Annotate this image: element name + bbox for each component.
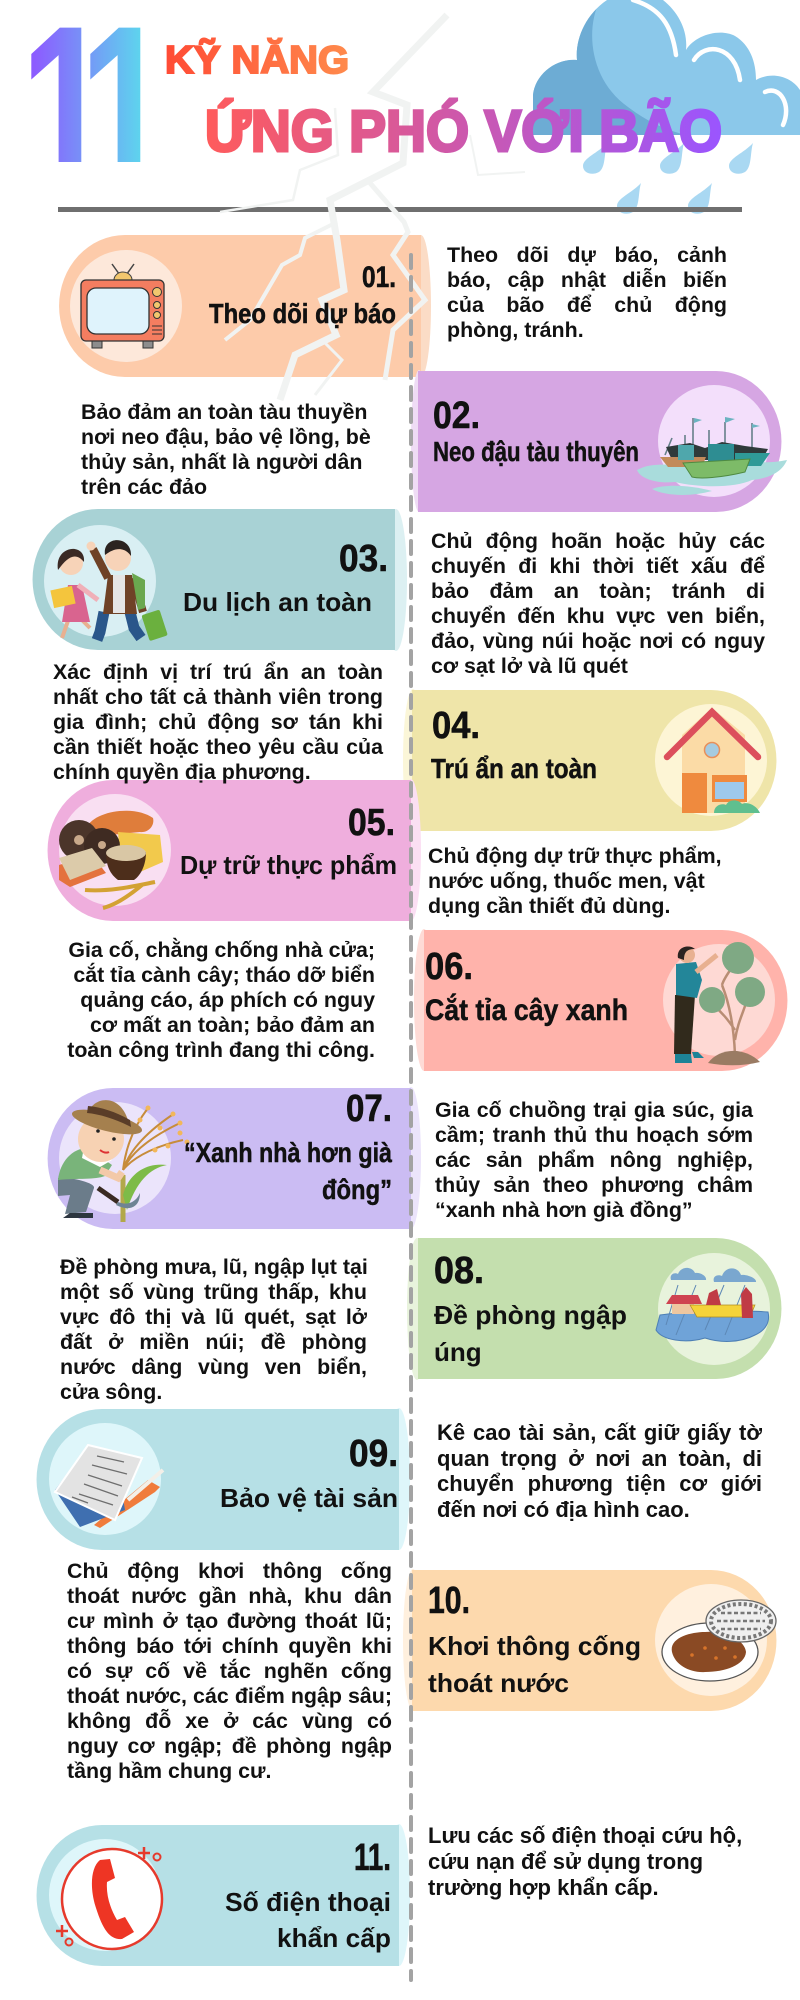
number 01: 01.	[362, 261, 396, 294]
panel: 11 số điện thoại khẩn cấp	[37, 1824, 410, 1966]
text: 03 description: đảo, vùng núi hoặc nơi có nguy	[431, 629, 765, 653]
text: 05 description: nước uống, thuốc men, vật	[428, 869, 705, 893]
panel: 08 đề phòng ngập úng	[407, 1238, 781, 1380]
icon: travellers	[50, 540, 168, 641]
text: 04 description	[53, 660, 384, 784]
heading 05: Dự trữ thực phẩm	[180, 850, 397, 880]
icon: television	[81, 264, 164, 348]
divider	[58, 207, 742, 212]
text: 03 description: bảo đảm an toàn; tránh di	[431, 579, 765, 603]
text: 09 description: chuyển phương tiện cơ giới	[437, 1471, 762, 1496]
text: 10 description: có sự cố về tắc nghẽn cống	[67, 1659, 392, 1683]
heading 07: đông”	[322, 1174, 392, 1205]
text: 06 description: Gia cố, chằng chống nhà cửa;	[68, 938, 375, 962]
text: 11 description: cứu nạn để sử dụng trong	[428, 1849, 703, 1874]
text: 04 description: Xác định vị trí trú ẩn an toàn	[53, 660, 383, 684]
panel: 04 trú ẩn an toàn	[403, 689, 776, 831]
panel: 01 theo dõi dự báo	[70, 250, 396, 362]
text: 04 description: nhất cho tất cả thành viên trong	[53, 685, 383, 709]
icon: man pruning tree	[674, 942, 765, 1065]
icon: fishing boats	[637, 417, 787, 495]
number 03: 03.	[339, 538, 388, 580]
text: 02 description: nơi neo đậu, bảo vệ lồng, bè	[81, 425, 371, 449]
text: 08 description: cửa sông.	[60, 1380, 162, 1404]
text: 01 description	[447, 243, 727, 342]
heading 11: Số điện thoại	[225, 1887, 391, 1917]
text: 06 description	[67, 938, 375, 1062]
icon: storm cloud	[533, 0, 800, 135]
number 10: 10.	[428, 1580, 470, 1622]
title: KỸ NĂNG: KỸ NĂNG	[165, 38, 349, 82]
panel: 10 khơi thông cống thoát nước	[403, 1569, 776, 1711]
panel: 09 bảo vệ tài sản	[37, 1408, 410, 1550]
icon: emergency phone	[56, 1847, 162, 1949]
icon: food	[59, 811, 163, 908]
text: 09 description: đến nơi có địa hình cao.	[437, 1497, 690, 1522]
icon: open drain cover	[662, 1600, 776, 1681]
number 06: 06.	[425, 946, 473, 988]
text: 02 description: trên các đảo	[81, 475, 207, 499]
icon: rain drops	[583, 143, 753, 214]
text: 03 description: chuyển đến khu vực ven biển,	[431, 604, 765, 628]
text: 10 description: tầng hầm chung cư.	[67, 1759, 271, 1783]
heading 06: Cắt tỉa cây xanh	[425, 993, 628, 1027]
text: 05 description	[428, 844, 722, 918]
text: 04 description: gia đình; chủ động sơ tán khi	[53, 710, 383, 734]
text: 01 description: của bão để chủ động	[447, 293, 727, 317]
panel: 01 background	[59, 235, 431, 377]
heading 10: Khơi thông cống	[428, 1631, 641, 1661]
heading 10	[428, 1631, 641, 1698]
heading 08: Đề phòng ngập	[434, 1300, 627, 1330]
text: 11 description: Lưu các số điện thoại cứu hộ,	[428, 1823, 742, 1848]
text: 07 description: “xanh nhà hơn già đồng”	[435, 1198, 693, 1222]
text: 06 description: toàn công trình đang thi công.	[67, 1038, 375, 1062]
text: 05 description: Chủ động dự trữ thực phẩm,	[428, 844, 722, 868]
text: 10 description: Chủ động khơi thông cống	[67, 1559, 392, 1583]
text: 02 description: thủy sản, nhất là người dân	[81, 450, 362, 474]
text: 10 description: thông báo tới chính quyền khi	[67, 1634, 392, 1658]
text: 06 description: quảng cáo, áp phích có nguy	[80, 988, 375, 1012]
text: 03 description: chuyến đi khi thời tiết xấu để	[431, 554, 765, 578]
text: 08 description: đất ở miền núi; đề phòng	[60, 1330, 367, 1354]
heading 08: úng	[434, 1337, 482, 1367]
text: 09 description: Kê cao tài sản, cất giữ giấy tờ	[437, 1420, 762, 1445]
text: 04 description: cần thiết hoặc theo yêu cầu của	[53, 735, 383, 759]
text: 07 description: các sản phẩm nông nghiệp,	[435, 1148, 753, 1172]
heading 09: Bảo vệ tài sản	[220, 1483, 398, 1513]
heading 10: thoát nước	[428, 1668, 569, 1698]
text: 03 description: Chủ động hoãn hoặc hủy các	[431, 529, 765, 553]
text: 10 description: thoát nước, các điểm ngập sâu;	[67, 1684, 392, 1708]
text: 04 description: chính quyền địa phương.	[53, 760, 311, 784]
number 05: 05.	[348, 802, 395, 844]
text: 08 description: một số vùng trũng thấp, khu	[60, 1280, 367, 1304]
text: 02 description: Bảo đảm an toàn tàu thuyền	[81, 400, 367, 424]
dashed timeline	[409, 255, 413, 1980]
text: 09 description	[437, 1420, 762, 1522]
panel: 03 du lịch an toàn	[33, 509, 407, 651]
text: 07 description: thủy sản theo phương châm	[435, 1173, 753, 1197]
heading 11: khẩn cấp	[277, 1923, 391, 1953]
panel: 06 cắt tỉa cây xanh	[414, 929, 787, 1071]
text: 10 description: không đỗ xe ở các vùng có	[67, 1709, 392, 1733]
heading 02: Neo đậu tàu thuyên	[433, 436, 639, 467]
text: 10 description: nguy cơ ngập; đề phòng ngập	[67, 1734, 392, 1758]
heading 07: “Xanh nhà hơn già	[184, 1137, 392, 1168]
text: 01 description: báo, cập nhật diễn biến	[447, 268, 727, 292]
text: 05 description: dụng cần thiết đủ dùng.	[428, 894, 670, 918]
title: ỨNG PHÓ VỚI BÃO: ỨNG PHÓ VỚI BÃO	[205, 99, 722, 164]
text: 10 description	[67, 1559, 392, 1783]
text: 10 description: thoát nước gần nhà, khu dân	[67, 1584, 392, 1608]
panel: 02 neo đậu tàu thuyền	[411, 370, 787, 512]
heading 04: Trú ẩn an toàn	[431, 753, 597, 784]
number 07: 07.	[346, 1088, 392, 1130]
text: 11 description: trường hợp khẩn cấp.	[428, 1875, 659, 1900]
text: 08 description: vực đô thị và lũ quét, sạt lở	[60, 1305, 367, 1329]
heading 01: Theo dõi dự báo	[209, 298, 396, 329]
text: 08 description: nước dâng vùng ven biển,	[60, 1355, 367, 1379]
text: 10 description: cư mình ở tạo đường thoát lũ;	[67, 1609, 392, 1633]
icon: farmer with rice	[58, 1100, 190, 1222]
text: 06 description: cơ mất an toàn; bảo đảm an	[90, 1013, 375, 1037]
text: 11 description	[428, 1823, 742, 1900]
heading 08	[434, 1300, 627, 1367]
icon: flood rescue	[656, 1268, 769, 1341]
number 02: 02.	[433, 395, 480, 437]
text: 07 description: cầm; tranh thủ thu hoạch sớm	[435, 1123, 753, 1147]
panel: 07 xanh nhà hơn già đồng	[48, 1087, 421, 1229]
text: 07 description: Gia cố chuồng trại gia súc, gia	[435, 1098, 753, 1122]
text: 07 description	[435, 1098, 754, 1222]
number 11: 11.	[354, 1837, 391, 1879]
text: 02 description	[81, 400, 371, 499]
heading 03: Du lịch an toàn	[183, 587, 372, 617]
text: 06 description: cắt tỉa cành cây; tháo dỡ biển	[73, 963, 375, 987]
number 08: 08.	[434, 1250, 484, 1292]
icon: house	[667, 708, 760, 813]
number 04: 04.	[432, 705, 480, 747]
number 09: 09.	[349, 1433, 398, 1475]
panel: 05 dự trữ thực phẩm	[48, 779, 421, 921]
text: 08 description: Đề phòng mưa, lũ, ngập lụt tại	[60, 1255, 368, 1279]
text: 01 description: Theo dõi dự báo, cảnh	[447, 243, 727, 267]
lightning bolt	[220, 15, 525, 400]
text: 03 description	[431, 529, 765, 678]
text: 09 description: quan trọng ở nơi an toàn, di	[437, 1446, 762, 1471]
heading 07	[184, 1137, 392, 1205]
icon: documents	[55, 1445, 163, 1528]
text: 03 description: cơ sạt lở và lũ quét	[431, 654, 628, 678]
text: 08 description	[60, 1255, 368, 1404]
heading 11	[225, 1887, 391, 1953]
text: 01 description: phòng, tránh.	[447, 318, 584, 342]
title: number 11	[31, 28, 140, 162]
